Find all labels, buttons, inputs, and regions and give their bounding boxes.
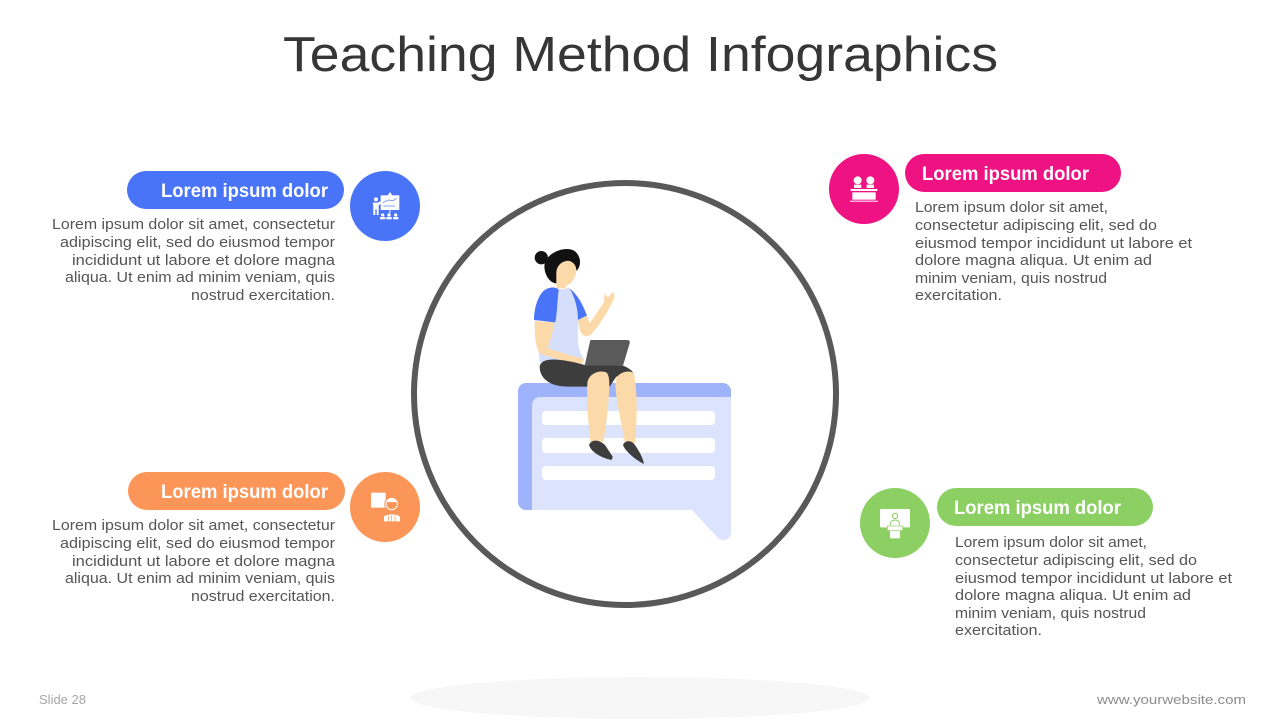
green body text: eiusmod tempor incididunt ut labore et <box>955 570 1233 587</box>
pink body text: dolore magna aliqua. Ut enim ad <box>915 252 1152 269</box>
panel: green bottom-right <box>860 488 1233 639</box>
pink body text: minim veniam, quis nostrud <box>915 270 1107 287</box>
orange body text: incididunt ut labore et dolore magna <box>72 553 336 570</box>
footer: website: www.yourwebsite.com <box>1096 692 1246 707</box>
orange body text <box>52 517 336 605</box>
green heading pill <box>937 488 1153 526</box>
blue body text: incididunt ut labore et dolore magna <box>72 252 336 269</box>
illustration: person with laptop on speech bubble <box>518 249 731 540</box>
blue body text: nostrud exercitation. <box>191 287 335 304</box>
green body text: Lorem ipsum dolor sit amet, <box>955 534 1147 551</box>
icon: speaker at podium with screen <box>860 488 930 558</box>
panel: pink top-right <box>829 154 1193 304</box>
orange body text: nostrud exercitation. <box>191 588 335 605</box>
orange heading pill: Lorem ipsum dolor <box>161 482 329 503</box>
title: Teaching Method Infographics <box>283 28 998 82</box>
orange heading pill <box>128 472 345 510</box>
blue heading pill <box>127 171 344 209</box>
pink heading pill <box>905 154 1121 192</box>
blue body text <box>52 216 336 304</box>
pink body text: Lorem ipsum dolor sit amet, <box>915 199 1108 216</box>
panel: orange bottom-left <box>52 472 420 605</box>
panel: blue top-left <box>52 171 420 304</box>
speech bubble <box>518 383 731 540</box>
orange body text: adipiscing elit, sed do eiusmod tempor <box>60 535 335 552</box>
blue body text: adipiscing elit, sed do eiusmod tempor <box>60 234 335 251</box>
green heading pill: Lorem ipsum dolor <box>954 498 1122 519</box>
pink body text: eiusmod tempor incididunt ut labore et <box>915 235 1193 252</box>
green body text: dolore magna aliqua. Ut enim ad <box>955 587 1191 604</box>
floor shadow ellipse <box>410 677 870 719</box>
blue body text: Lorem ipsum dolor sit amet, consectetur <box>52 216 335 233</box>
blue heading pill: Lorem ipsum dolor <box>161 181 329 202</box>
person <box>534 249 644 464</box>
green body text: minim veniam, quis nostrud <box>955 605 1146 622</box>
footer: slide number: Slide 28 <box>39 692 86 707</box>
pink body text <box>915 199 1193 304</box>
orange body text: Lorem ipsum dolor sit amet, consectetur <box>52 517 335 534</box>
icon: two people at a desk <box>829 154 899 224</box>
green body text: consectetur adipiscing elit, sed do <box>955 552 1197 569</box>
icon: teacher at presentation board <box>350 171 420 241</box>
pink heading pill: Lorem ipsum dolor <box>922 164 1090 185</box>
icon: speaker with speech box <box>350 472 420 542</box>
orange body text: aliqua. Ut enim ad minim veniam, quis <box>65 570 335 587</box>
central ring <box>414 183 836 605</box>
blue body text: aliqua. Ut enim ad minim veniam, quis <box>65 269 335 286</box>
pink body text: consectetur adipiscing elit, sed do <box>915 217 1157 234</box>
green body text <box>955 534 1233 639</box>
pink body text: exercitation. <box>915 287 1002 304</box>
green body text: exercitation. <box>955 622 1042 639</box>
